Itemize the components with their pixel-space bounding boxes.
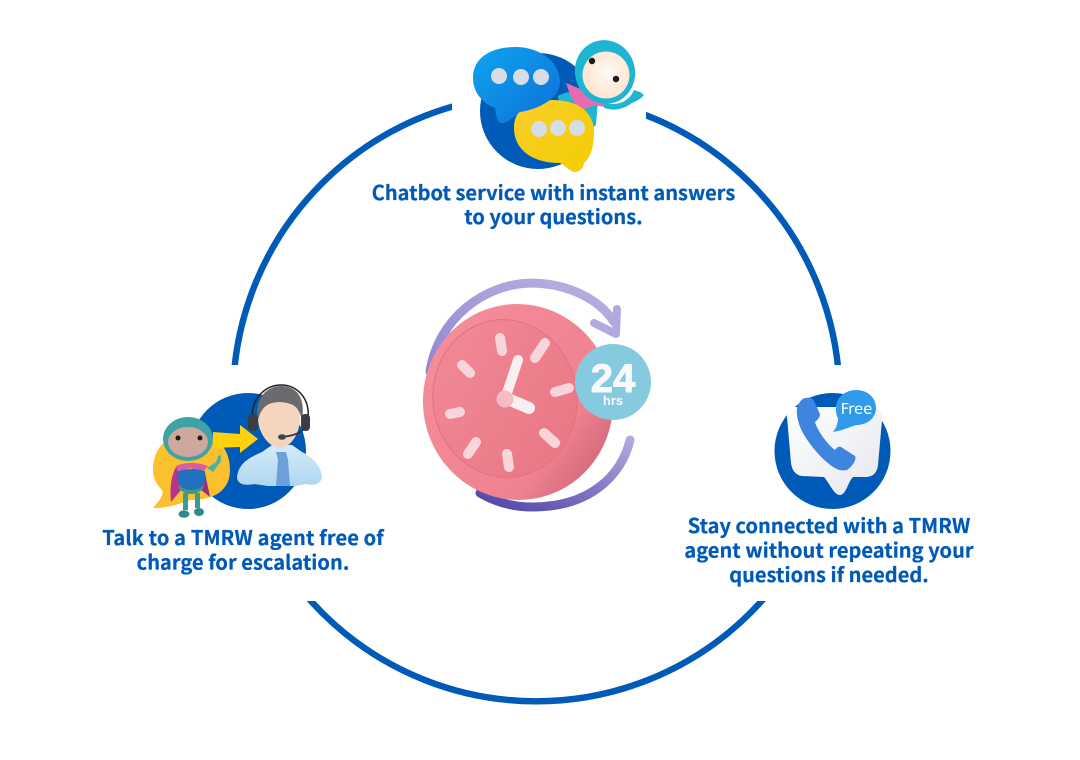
caption: agent: Talk to a TMRW agent free of (102, 522, 385, 551)
badge: 24 hrs (575, 344, 651, 420)
caption: chatbot: Chatbot service with instant answers (372, 177, 735, 206)
caption: agent: charge for escalation. (137, 546, 349, 576)
handset (797, 398, 856, 470)
robot mascot (163, 417, 221, 518)
badge: 24 hrs: 24 (591, 357, 636, 401)
arrow: upper circular arrow (430, 283, 617, 372)
yellow speech bubble (514, 100, 594, 172)
badge: 24 hrs: hrs (603, 393, 623, 408)
arrow: yellow (213, 425, 258, 453)
icon: chatbot with speech bubbles (473, 33, 644, 172)
caption: stay connected: agent without repeating your (684, 534, 974, 564)
Free speech bubble: Free (841, 400, 872, 418)
white speech bubble (787, 407, 882, 495)
agent with headset (237, 385, 322, 486)
yellow speech bubble (153, 433, 230, 508)
blue speech bubble (473, 47, 560, 123)
icon: robot and TMRW agent (153, 385, 322, 518)
icon: phone handset with Free bubble (774, 390, 890, 509)
clock body (410, 292, 626, 512)
caption: stay connected: Stay connected with a TMRW (688, 510, 970, 539)
caption: stay connected: questions if needed. (729, 559, 929, 588)
arrow: lower circular arc (480, 440, 630, 507)
icon: 24 hour clock (410, 283, 651, 512)
ring: large circular cycle outline (200, 85, 880, 701)
robot mascot (558, 33, 644, 130)
caption: chatbot: to your questions. (464, 201, 643, 230)
